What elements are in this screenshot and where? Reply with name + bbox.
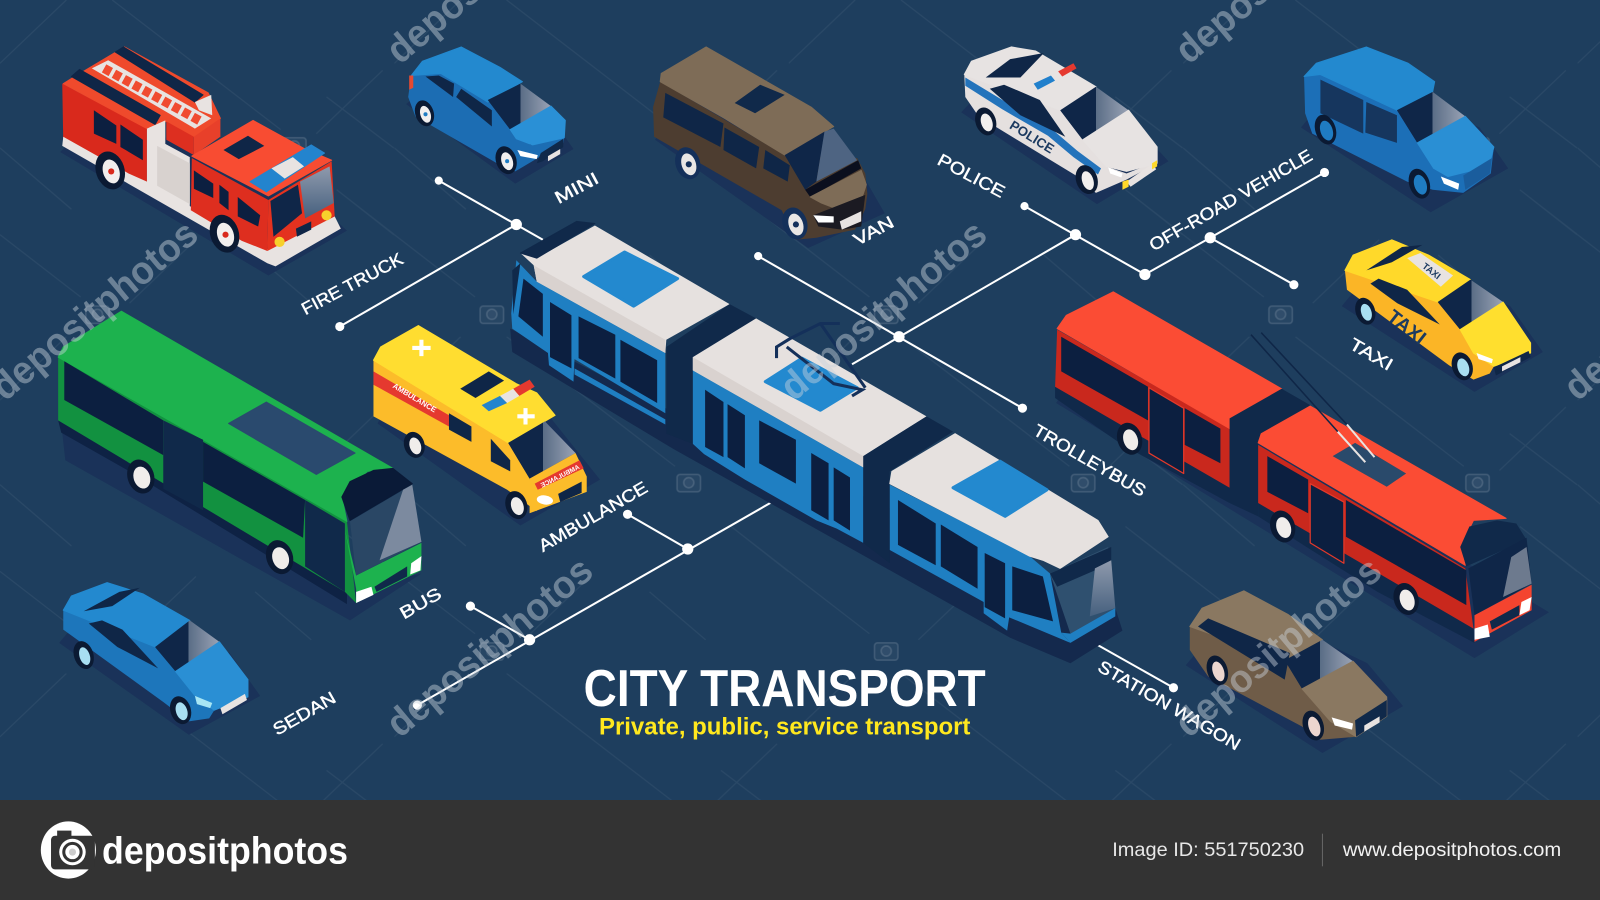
title: CITY TRANSPORT [584, 660, 986, 718]
label: taxi: TAXI [1346, 334, 1397, 375]
vehicle: ambulance: AMBULANCE [539, 464, 581, 490]
vehicle: tram [510, 221, 1122, 663]
vehicle: bus [58, 311, 421, 620]
vehicle: trolleybus [1055, 292, 1549, 658]
vehicle: fire truck [60, 47, 347, 276]
vehicle: taxi: TAXI [1383, 306, 1430, 349]
vehicle: off-road vehicle [1301, 47, 1508, 212]
footer brand name: depositphotos [102, 829, 348, 871]
vehicle: sedan [59, 583, 260, 735]
label: trolleybus: TROLLEYBUS [1030, 420, 1150, 501]
icon: depositphotos logo [41, 821, 96, 879]
connector network: van, trolleybus, police, off-road, taxi [754, 168, 1329, 413]
label: sedan: SEDAN [269, 687, 339, 739]
website: www.depositphotos.com [1342, 839, 1561, 861]
connector: station wagon [1094, 643, 1178, 692]
label: bus: BUS [396, 583, 445, 623]
vehicle: taxi: TAXI [1420, 261, 1442, 281]
watermark text: depositphotos [378, 549, 601, 746]
watermark text: depositphotos [1167, 549, 1390, 746]
vehicle: van [653, 47, 885, 248]
vehicle: ambulance [373, 326, 600, 526]
label: police: POLICE [934, 150, 1009, 202]
vehicle: police car: POLICE [1007, 118, 1057, 157]
subtitle: Private, public, service transport [599, 714, 970, 741]
footer bar [0, 800, 1600, 900]
image id: Image ID: 551750230 [1112, 839, 1304, 861]
vehicle: station wagon [1186, 591, 1403, 753]
label: mini: MINI [551, 168, 602, 208]
label: off-road vehicle: OFF-ROAD VEHICLE [1146, 145, 1316, 255]
label: station wagon: STATION WAGON [1095, 656, 1244, 754]
watermark text: depositphotos [772, 212, 995, 409]
label: van: VAN [850, 212, 897, 250]
vehicle: ambulance: AMBULANCE [391, 381, 438, 414]
label: ambulance: AMBULANCE [535, 477, 651, 556]
label: fire truck: FIRE TRUCK [298, 248, 407, 319]
connector network: ambulance, bus, sedan [413, 500, 776, 710]
connector network: fire truck and mini [335, 177, 543, 331]
vehicle: mini [406, 47, 573, 184]
vehicle: police car [961, 47, 1168, 204]
vehicle: taxi [1342, 240, 1543, 392]
